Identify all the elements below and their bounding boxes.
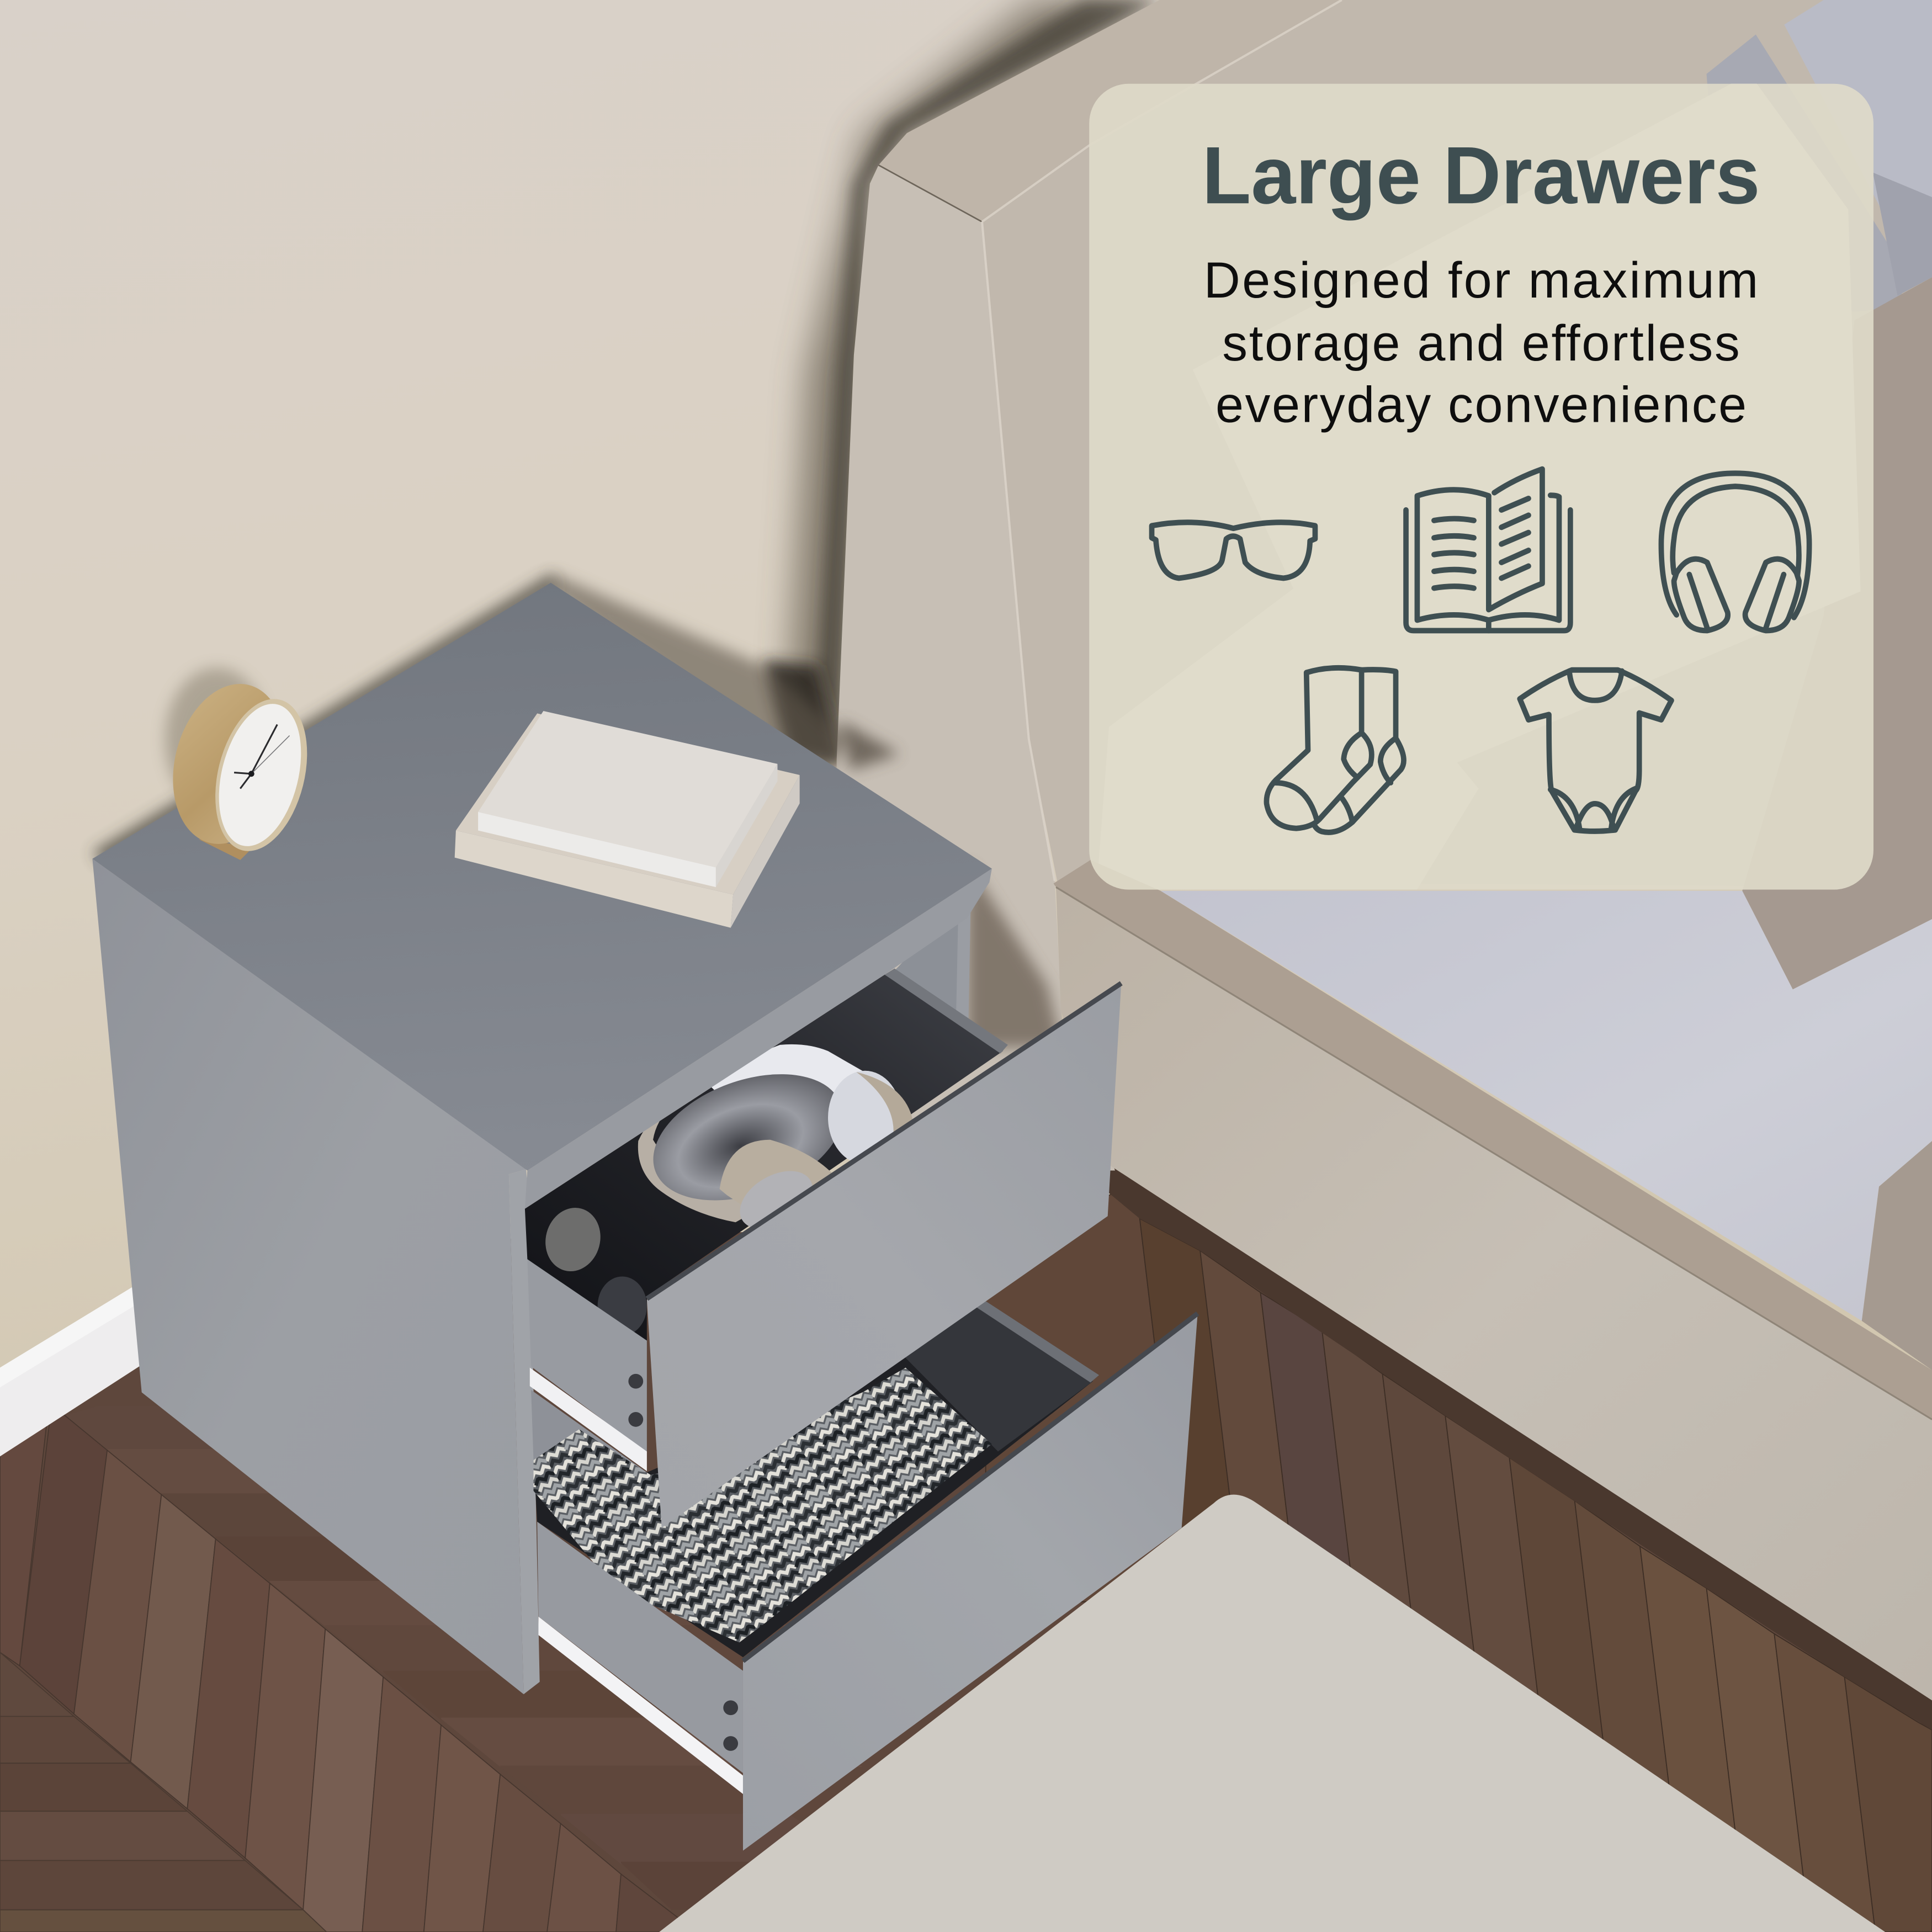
floor planks: horizontal band near the nightstand [64,1406,863,1910]
top drawer interior [525,975,1003,1343]
top drawer side rail [885,968,1008,1053]
bed headboard [837,0,1932,1171]
panel description: Designed for maximum [1204,252,1758,309]
icon set [1152,469,1809,832]
pillows [1707,0,1932,989]
clock [157,668,322,861]
info panel [1089,84,1873,890]
wall [0,0,1932,1479]
top drawer side panel [527,1259,647,1453]
floor planks: chevron band [0,1378,684,1932]
bottom drawer runner [538,1617,743,1794]
throw blanket [1862,1141,1932,1370]
nightstand [92,583,1198,1851]
floor planks: under the bed [986,1183,1932,1932]
bottom drawer screws [723,1700,738,1751]
headphones in drawer [636,1044,913,1241]
nightstand top [92,583,992,1171]
wall shadow cast by the bed [763,0,1159,764]
nightstand left side [92,859,526,1694]
top drawer front [647,983,1121,1528]
knitted garment [534,1368,992,1642]
nightstand shadows [92,573,850,865]
stacked books [455,711,800,928]
icon: open book [1406,469,1570,630]
icon: socks [1266,668,1404,832]
wooden floor [0,1163,1932,1932]
top drawer runner [530,1368,647,1471]
floor planks: lower left horizontal band [0,1652,327,1932]
panel title: Large Drawers [1202,130,1760,221]
bottom drawer interior [534,1306,1093,1657]
rug [659,1495,1885,1932]
icon: headphones [1661,473,1809,630]
panel description: storage and effortless [1222,315,1740,371]
bed sheet [1161,891,1932,1321]
nightstand front strip [509,1169,540,1694]
panel description: everyday convenience [1216,377,1747,433]
icon: baby bodysuit [1520,670,1671,831]
bed frame rail [1053,860,1932,1700]
icon: glasses [1152,522,1315,578]
lower cavity panel [531,1390,690,1497]
bottom drawer front [743,1313,1198,1851]
nightstand top front beam [525,869,992,1209]
shadow band below the bed rail [1097,1163,1932,1730]
bottom drawer back panel [901,1306,1093,1451]
bottom drawer side panel [537,1522,743,1773]
sunglasses in drawer [538,1202,647,1336]
headboard shadows from nightstand [840,721,899,770]
top drawer screws [628,1374,643,1427]
panel description [1204,252,1758,433]
skirting board [0,1285,143,1456]
nightstand back leg [891,890,971,1020]
